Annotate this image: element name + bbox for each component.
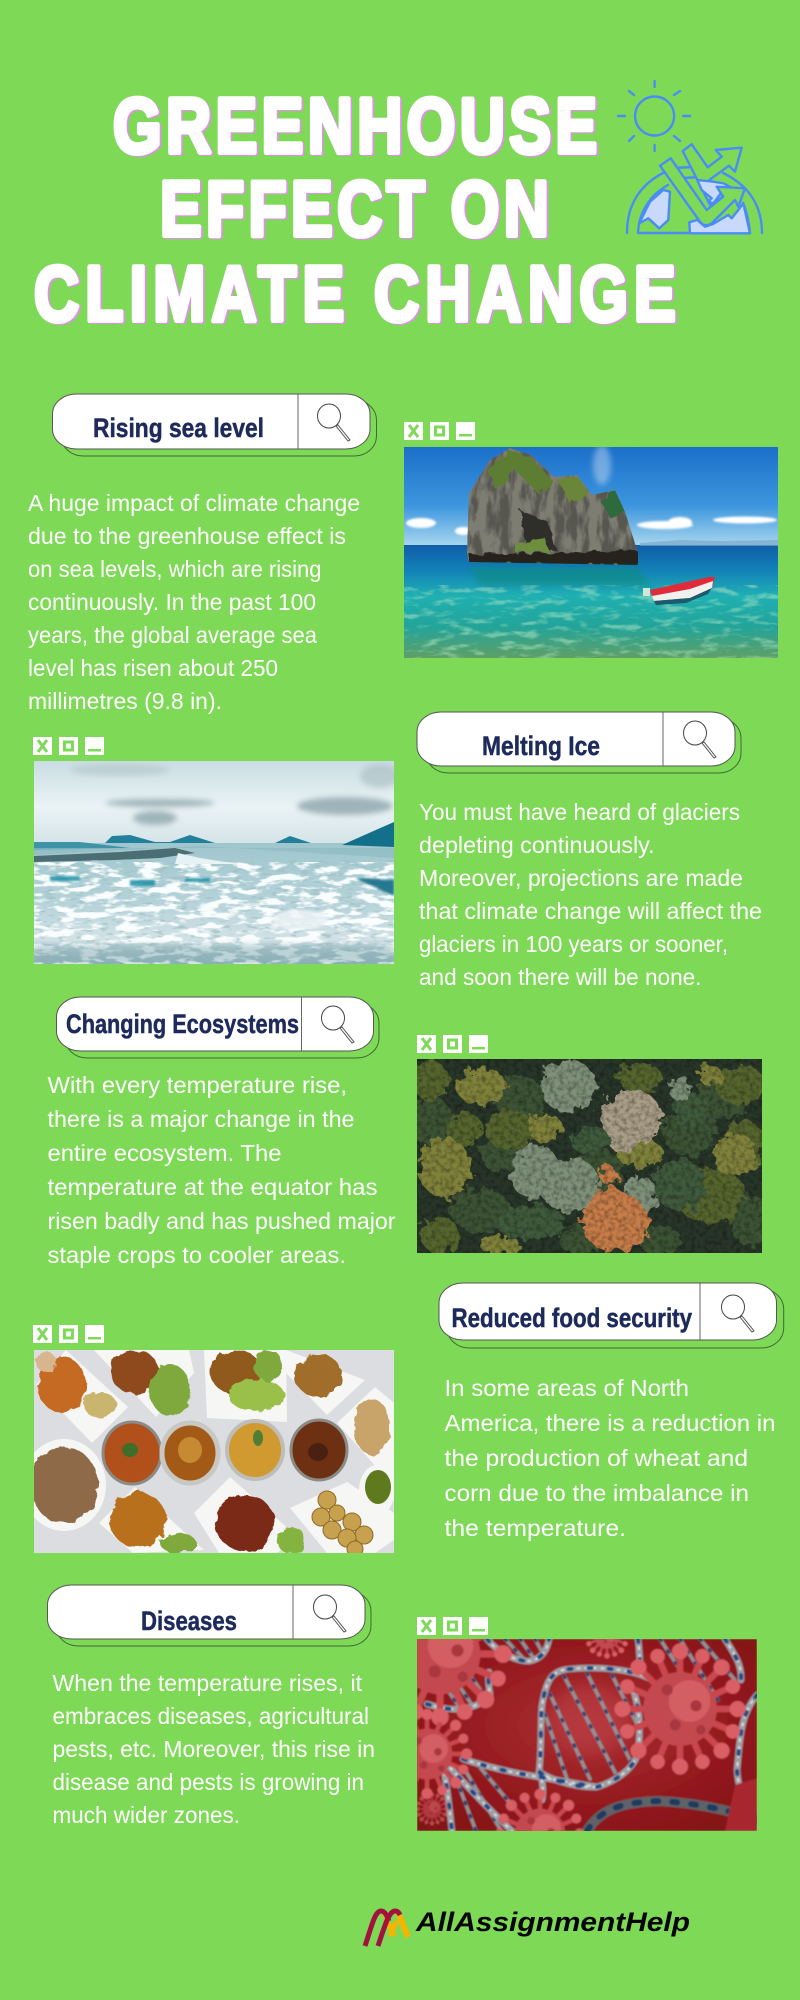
body text: reduced food security — [444, 1375, 776, 1541]
search bar heading: changing ecosystems — [56, 997, 379, 1058]
body text: rising sea level: millimetres (9.8 in). — [28, 688, 222, 714]
search bar heading: rising sea level: Rising sea level — [93, 413, 264, 443]
section: reduced food security — [22, 1283, 784, 1557]
photo: melting ice — [34, 761, 400, 964]
body text: changing ecosystems: risen badly and has pushed major — [48, 1208, 396, 1234]
search bar heading: melting ice — [417, 712, 741, 773]
photo: island and boat — [404, 445, 778, 658]
boat — [650, 577, 715, 601]
search bar heading: melting ice: Melting Ice — [482, 731, 600, 761]
window controls — [417, 1035, 488, 1053]
body text: reduced food security: corn due to the imbalance in — [444, 1480, 749, 1506]
body text: rising sea level: level has risen about 250 — [28, 655, 278, 681]
body text: changing ecosystems: entire ecosystem. The — [48, 1140, 282, 1166]
body text: melting ice — [419, 799, 762, 990]
photo: food platter — [22, 1349, 395, 1557]
body text: reduced food security: the production of wheat and — [444, 1445, 748, 1471]
search bar heading: diseases — [48, 1585, 371, 1646]
body text: diseases: pests, etc. Moreover, this rise in — [52, 1736, 375, 1762]
body text: melting ice: glaciers in 100 years or sooner, — [419, 931, 728, 957]
search bar heading: diseases: Diseases — [141, 1606, 237, 1636]
title: EFFECT ON — [162, 166, 550, 253]
body text: rising sea level: continuously. In the past 100 — [28, 589, 316, 615]
search bar heading: changing ecosystems: Changing Ecosystems — [66, 1009, 299, 1039]
logo wordmark: AllAssignmentHelp — [415, 1907, 690, 1937]
window controls — [33, 1325, 104, 1343]
title — [34, 82, 677, 338]
body text: rising sea level: due to the greenhouse effect is — [28, 523, 346, 549]
title: GREENHOUSE — [113, 82, 597, 169]
body text: rising sea level: years, the global average sea — [28, 622, 317, 648]
body text: rising sea level: on sea levels, which are rising — [28, 556, 322, 582]
section: rising sea level — [28, 394, 778, 714]
body text: changing ecosystems: temperature at the equator has — [48, 1174, 378, 1200]
icon: sun over globe with arrow — [618, 81, 762, 233]
search bar heading: reduced food security: Reduced food security — [452, 1303, 692, 1333]
body text: reduced food security: America, there is a reduction in — [444, 1410, 776, 1436]
window controls — [33, 737, 104, 755]
body text: rising sea level — [28, 490, 360, 714]
body text: diseases — [52, 1670, 375, 1828]
window controls — [404, 422, 475, 440]
title: CLIMATE CHANGE — [34, 250, 676, 337]
title: CLIMATE CHANGE — [36, 251, 677, 338]
window controls — [417, 1617, 488, 1635]
body text: melting ice: that climate change will affect the — [419, 898, 762, 924]
search bar heading: reduced food security — [439, 1283, 784, 1348]
body text: diseases: embraces diseases, agricultural — [52, 1703, 369, 1729]
section: melting ice — [33, 712, 762, 990]
body text: melting ice: Moreover, projections are made — [419, 865, 743, 891]
title: GREENHOUSE — [115, 83, 599, 170]
logo: AllAssignmentHelp — [365, 1907, 690, 1946]
body text: changing ecosystems — [48, 1072, 396, 1268]
title: EFFECT ON — [160, 165, 549, 252]
logo mark — [365, 1911, 408, 1946]
body text: reduced food security: the temperature. — [444, 1515, 626, 1541]
body text: changing ecosystems: staple crops to cooler areas. — [48, 1242, 346, 1268]
body text: reduced food security: In some areas of North — [444, 1375, 689, 1401]
body text: melting ice: depleting continuously. — [419, 832, 655, 858]
body text: rising sea level: A huge impact of climate change — [28, 490, 360, 516]
section: changing ecosystems — [48, 997, 770, 1268]
photo: DNA and virus — [417, 1639, 757, 1831]
body text: diseases: When the temperature rises, it — [52, 1670, 363, 1696]
body text: melting ice: and soon there will be none. — [419, 964, 702, 990]
search bar heading: rising sea level — [52, 394, 376, 456]
body text: diseases: much wider zones. — [52, 1802, 240, 1828]
body text: changing ecosystems: With every temperature rise, — [48, 1072, 347, 1098]
body text: melting ice: You must have heard of glaciers — [419, 799, 740, 825]
photo: forest canopy — [408, 1059, 770, 1255]
body text: changing ecosystems: there is a major change in the — [48, 1106, 354, 1132]
body text: diseases: disease and pests is growing in — [52, 1769, 364, 1795]
section: diseases — [47, 1584, 757, 1831]
